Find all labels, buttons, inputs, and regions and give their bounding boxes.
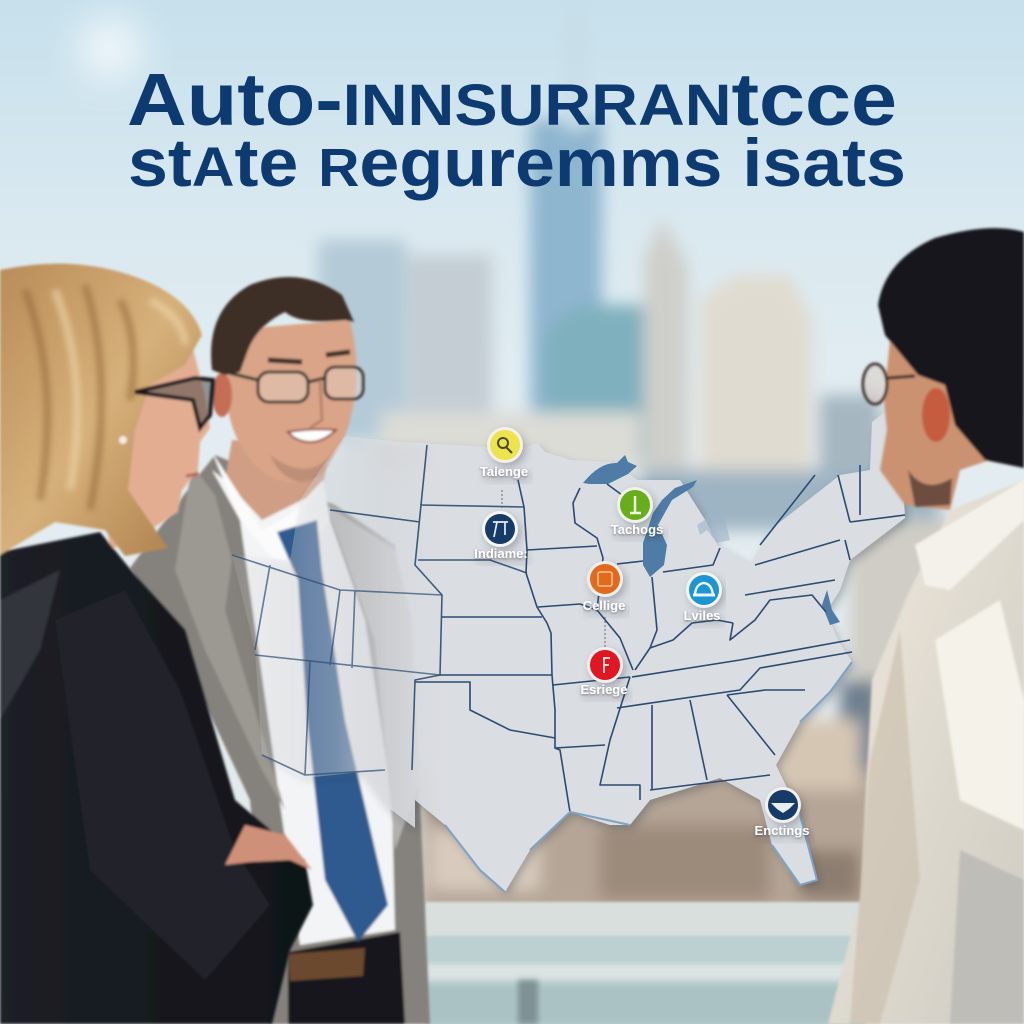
map pin: orange Cellige xyxy=(583,561,625,613)
lapels xyxy=(175,465,285,810)
shirt xyxy=(212,470,395,945)
belt and trousers xyxy=(288,932,405,1024)
background: blurred city skyline xyxy=(80,0,960,915)
tie xyxy=(277,520,388,942)
person: centre man in grey suit xyxy=(130,277,430,1024)
hair xyxy=(0,264,202,556)
Great Lakes and bays xyxy=(583,455,840,625)
map pin: navy Enctings (Florida) xyxy=(755,787,809,838)
person: man with dark hair (right foreground) xyxy=(828,228,1024,1024)
map pin: yellow Talenge xyxy=(480,427,528,479)
map pin: navy Indiame: Indiame: xyxy=(474,546,528,561)
neck and face xyxy=(880,340,990,510)
title xyxy=(127,58,906,201)
map pin: yellow Talenge: Talenge xyxy=(480,464,528,479)
state boundaries xyxy=(232,445,905,812)
title line 1: Auto- INNSURRAN tcce xyxy=(127,58,897,141)
neck xyxy=(225,440,330,520)
map landmass xyxy=(232,412,905,892)
map pin: navy Indiame xyxy=(474,511,528,561)
coastline highlight xyxy=(445,662,852,892)
map pin: blue Lviles xyxy=(684,572,722,623)
glasses xyxy=(135,378,213,428)
head xyxy=(226,320,357,483)
brows xyxy=(268,352,350,362)
jacket xyxy=(0,532,313,1024)
hair xyxy=(878,228,1024,468)
map pin: red Esriege xyxy=(581,647,627,697)
shirt xyxy=(828,480,1024,1024)
title line 2: stAte Reguremms isats xyxy=(128,125,906,201)
map pin: orange Cellige: Cellige xyxy=(583,598,625,613)
map pin: navy Enctings (Florida): Enctings xyxy=(755,823,809,838)
map pin: red Esriege: Esriege xyxy=(581,682,627,697)
collar xyxy=(212,452,330,565)
US map with state boundaries xyxy=(232,412,905,892)
person: woman with glasses (left foreground) xyxy=(0,264,313,1024)
hand xyxy=(225,825,312,870)
glasses xyxy=(225,367,363,402)
glasses xyxy=(888,376,915,378)
neck and face xyxy=(100,340,210,550)
map pin: blue Lviles: Lviles xyxy=(684,608,720,623)
smile xyxy=(288,429,336,442)
hair xyxy=(211,277,354,375)
dotted connectors xyxy=(502,490,605,648)
lips xyxy=(186,474,198,476)
railing and glass balustrade xyxy=(425,902,865,1024)
jacket xyxy=(130,455,430,1024)
map pin: green Tachogs xyxy=(611,487,663,537)
map pin: green Tachogs: Tachogs xyxy=(611,522,663,537)
